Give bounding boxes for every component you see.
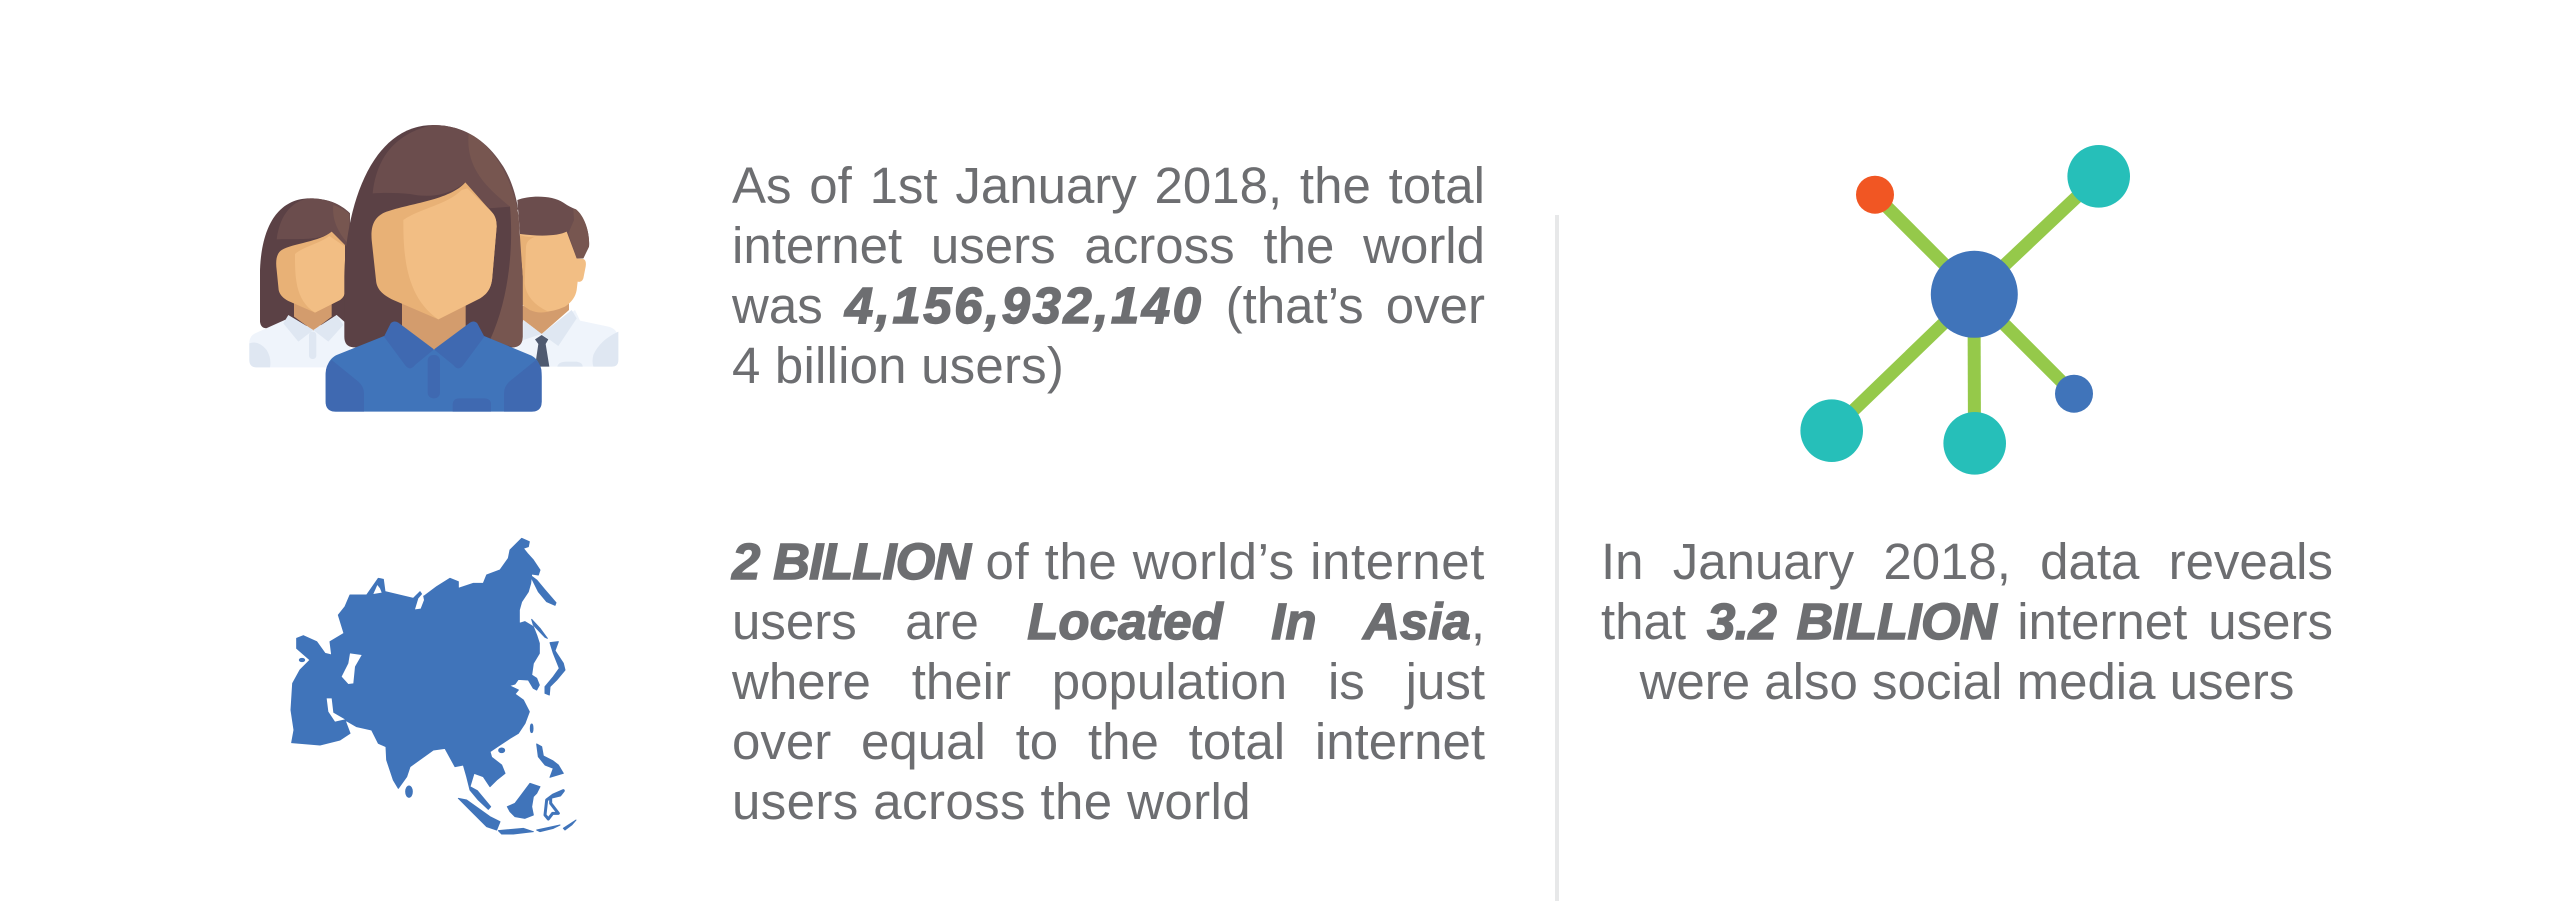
text: internet users in Asia: over equal to the total internet (732, 713, 1485, 770)
text: social media users: that 3.2 BILLION internet users (1601, 593, 2333, 650)
text: total internet users: was 4,156,932,140 (that’s over (732, 277, 1485, 334)
text: social media users (1601, 533, 2333, 710)
text: internet users in Asia: users are Located In Asia, (732, 593, 1485, 650)
text: total internet users: 4 billion users) (732, 337, 1064, 394)
right man (513, 197, 618, 367)
text: total internet users: As of 1st January 2018, the total (732, 157, 1485, 214)
text: social media users: were also social media users (1640, 653, 2294, 710)
text: total internet users: internet users across the world (732, 217, 1485, 274)
text: total internet users (732, 157, 1485, 394)
icon: map of Asia (290, 538, 576, 834)
text: social media users: In January 2018, data reveals (1601, 533, 2333, 590)
text: internet users in Asia: 2 BILLION of the world’s internet (732, 533, 1485, 590)
text: internet users in Asia: where their population is just (732, 653, 1485, 710)
left woman (249, 198, 350, 367)
icon: group of three people (249, 125, 618, 412)
text: internet users in Asia: users across the world (732, 773, 1251, 830)
vertical divider (1555, 215, 1559, 901)
text: internet users in Asia (730, 533, 1485, 830)
centre woman (326, 125, 542, 412)
